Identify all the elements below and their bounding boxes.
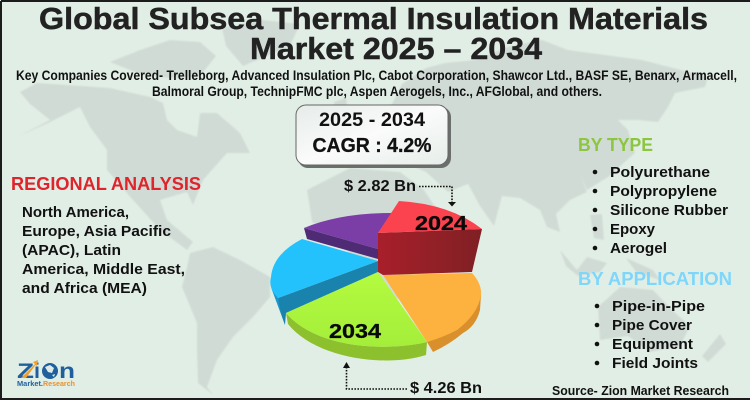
by application list: Field Joints [612, 355, 698, 372]
arrow: 2024 value [419, 186, 456, 206]
by application list: Equipment [612, 336, 693, 353]
logo: Zion Market.Research: o [42, 360, 58, 383]
key companies text [16, 68, 737, 99]
by application heading: BY APPLICATION [578, 269, 732, 289]
by type heading: BY TYPE [578, 135, 653, 155]
regional analysis text: America, Middle East, [22, 261, 185, 278]
logo: Zion Market.Research [17, 360, 75, 388]
logo: Zion Market.Research: Z [17, 360, 34, 383]
by type list: Epoxy [610, 221, 656, 238]
title: Market 2025 – 2034 [250, 31, 543, 66]
pie chart [270, 201, 482, 360]
2034 value label: $ 4.26 Bn [410, 380, 482, 397]
slice: purple [304, 213, 392, 259]
regional analysis text: North America, [22, 204, 129, 221]
by application list: Pipe-in-Pipe [612, 298, 705, 315]
key companies text: Balmoral Group, TechnipFMC plc, Aspen Aerogels, Inc., AFGlobal, and others. [152, 84, 602, 99]
CAGR callout box [296, 105, 451, 168]
icon: globe [42, 363, 58, 379]
title [39, 1, 708, 66]
title: Global Subsea Thermal Insulation Materials [39, 1, 708, 36]
by type list: Aerogel [610, 240, 667, 257]
2024 value label: $ 2.82 Bn [344, 178, 416, 195]
by type list [593, 164, 728, 257]
arrow: 2034 value [343, 362, 407, 389]
by type list: Polypropylene [610, 183, 717, 200]
slice: green [286, 272, 427, 360]
CAGR callout box: 2025 - 2034 [319, 110, 425, 131]
by type list: Silicone Rubber [610, 202, 728, 219]
slice: red (2024) [378, 201, 482, 275]
regional analysis heading: REGIONAL ANALYSIS [11, 173, 201, 194]
logo: Zion Market.Research: i [34, 360, 40, 383]
source text: Source- Zion Market Research [552, 383, 729, 398]
by application list: Pipe Cover [612, 317, 692, 334]
regional analysis text: Europe, Asia Pacific [22, 223, 171, 240]
regional analysis text: and Africa (MEA) [22, 280, 147, 297]
by type list: Polyurethane [610, 164, 710, 181]
label: 2034: 2034 [329, 321, 382, 343]
by application list [595, 298, 705, 372]
regional analysis text [22, 204, 185, 297]
slice: orange [383, 273, 481, 352]
slice: blue [270, 239, 378, 325]
logo: Zion Market.Research: n [59, 360, 75, 383]
CAGR callout box: CAGR : 4.2% [312, 135, 432, 157]
regional analysis text: (APAC), Latin [22, 242, 121, 259]
logo: Zion Market.Research: Research [43, 379, 75, 388]
label: 2024: 2024 [415, 213, 468, 235]
logo: Zion Market.Research: Market. [17, 379, 43, 388]
